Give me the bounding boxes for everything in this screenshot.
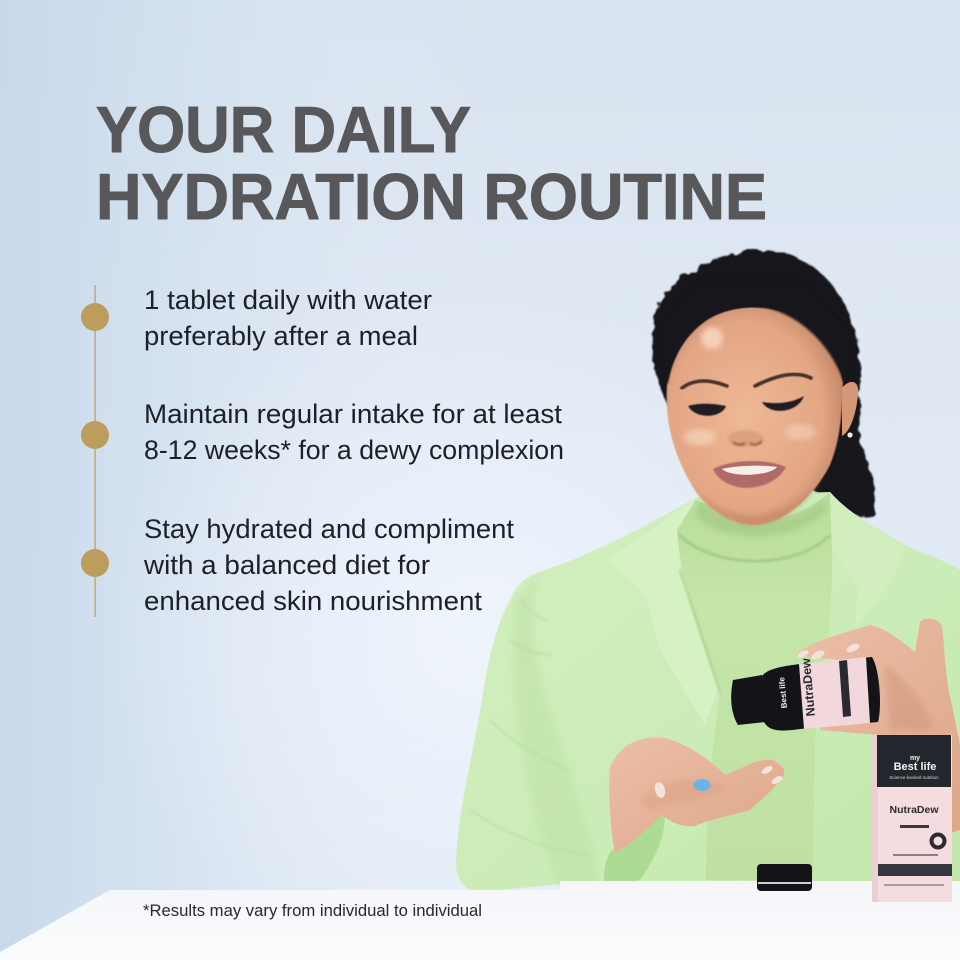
palm shade bbox=[640, 779, 730, 812]
step 2 text: 8-12 weeks* for a dewy complexion bbox=[144, 435, 564, 465]
box tagline: Science-backed nutrition bbox=[889, 775, 939, 780]
box badge bbox=[930, 832, 946, 850]
bottle pink label bbox=[799, 657, 870, 729]
title: HYDRATION ROUTINE bbox=[96, 160, 767, 233]
sleeve gathers bbox=[470, 600, 590, 855]
right lapel bbox=[830, 492, 905, 628]
box pink body bbox=[872, 735, 952, 902]
eyes bbox=[688, 396, 804, 416]
lid on table bbox=[757, 864, 812, 891]
hair back bbox=[652, 251, 875, 517]
lips bbox=[713, 461, 786, 488]
teeth bbox=[722, 466, 777, 475]
step 1 text: 1 tablet daily with water bbox=[144, 285, 432, 315]
nose bbox=[727, 430, 765, 447]
box pill label bbox=[900, 825, 929, 828]
left lapel bbox=[607, 498, 718, 725]
pill bbox=[694, 779, 710, 791]
bottle bbox=[731, 657, 880, 731]
bottle body bbox=[762, 657, 880, 731]
person bbox=[456, 251, 960, 892]
forehead highlight bbox=[701, 327, 723, 349]
eyebrows bbox=[682, 374, 811, 388]
cheek highlight right bbox=[784, 424, 816, 440]
sleeve puff shading bbox=[513, 572, 600, 888]
step marker 3 bbox=[81, 549, 109, 577]
ear bbox=[842, 382, 858, 436]
step 1 text: preferably after a meal bbox=[144, 321, 418, 351]
turtleneck fold bbox=[678, 534, 830, 561]
step 3 text: enhanced skin nourishment bbox=[144, 586, 483, 616]
turtleneck bbox=[677, 492, 832, 880]
jacket bbox=[456, 492, 960, 892]
raised hand bbox=[795, 619, 960, 835]
step 2 text: Maintain regular intake for at least bbox=[144, 399, 563, 429]
left hand and wrist bbox=[609, 737, 784, 853]
step marker 1 bbox=[81, 303, 109, 331]
box logo: Best life bbox=[894, 761, 936, 773]
box logo small word: my bbox=[910, 755, 920, 762]
box side edge bbox=[872, 735, 878, 902]
cheek highlight left bbox=[684, 429, 716, 445]
fingertips bbox=[796, 642, 861, 661]
neck shadow bbox=[695, 498, 826, 537]
step 2 text bbox=[144, 399, 564, 465]
title bbox=[96, 93, 767, 233]
bottle label dark stripe bbox=[839, 660, 851, 717]
lapel shadow bbox=[680, 570, 720, 692]
product box bbox=[872, 735, 952, 902]
box dark header bbox=[877, 735, 951, 787]
step marker 2 bbox=[81, 421, 109, 449]
footnote: *Results may vary from individual to individual bbox=[143, 901, 482, 920]
step 3 text bbox=[143, 514, 515, 616]
face bbox=[667, 308, 843, 525]
step 3 text: with a balanced diet for bbox=[143, 550, 430, 580]
timeline bbox=[81, 285, 109, 617]
box small copy bbox=[893, 854, 938, 856]
forehead hairline bbox=[658, 280, 858, 385]
bottle brand: NutraDew bbox=[799, 657, 818, 717]
box dark band bbox=[878, 864, 952, 876]
bottle logo: Best life bbox=[777, 676, 789, 709]
pearl earring bbox=[847, 432, 853, 438]
table bbox=[0, 881, 960, 960]
bottle neck bbox=[731, 675, 765, 725]
chin shadow bbox=[692, 478, 822, 525]
box bottom copy bbox=[884, 884, 944, 886]
title: YOUR DAILY bbox=[96, 93, 471, 166]
step 1 text bbox=[144, 285, 432, 351]
palm crease bbox=[885, 665, 935, 730]
nails on left hand bbox=[653, 764, 784, 799]
step 3 text: Stay hydrated and compliment bbox=[144, 514, 515, 544]
box brand: NutraDew bbox=[889, 804, 939, 816]
sleeve cuff under wrist bbox=[604, 812, 665, 888]
